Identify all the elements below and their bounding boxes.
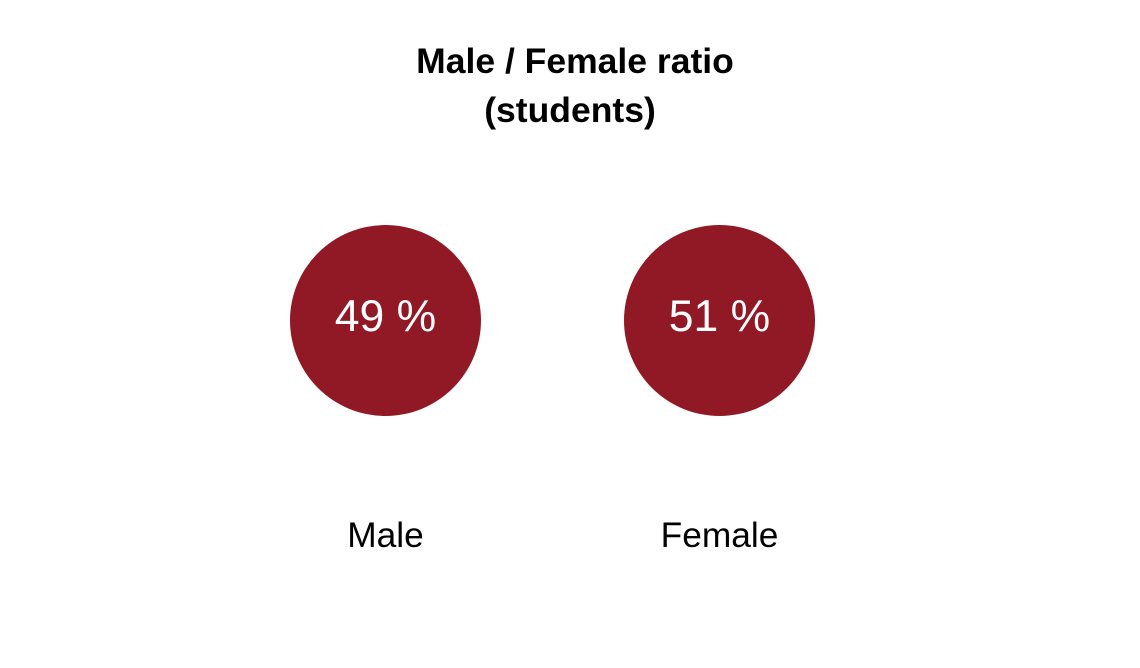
- circle: female percentage: [624, 225, 815, 416]
- title: [416, 41, 734, 130]
- value: female: 51 %: [669, 292, 770, 341]
- label: male: Male: [347, 516, 424, 555]
- title: (students): [484, 90, 656, 130]
- circle: male percentage: [290, 225, 481, 416]
- label: female: Female: [661, 516, 778, 555]
- value: male: 49 %: [335, 292, 436, 341]
- title: Male / Female ratio: [416, 41, 734, 81]
